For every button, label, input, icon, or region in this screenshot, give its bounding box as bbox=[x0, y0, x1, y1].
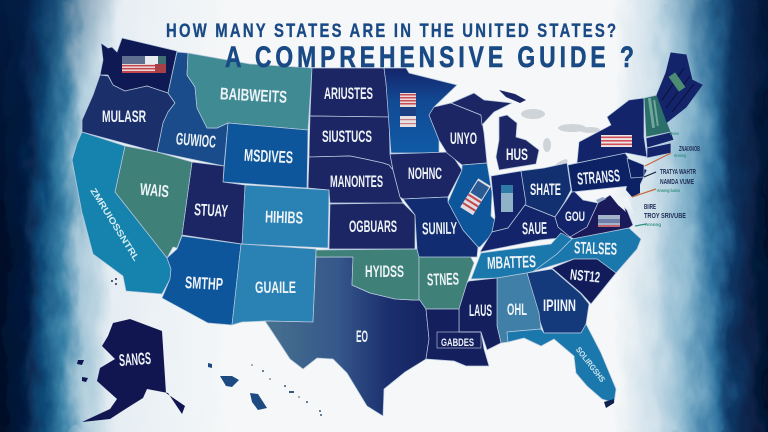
state: Wisconsin bbox=[429, 103, 487, 165]
callouts: east coast annotations: Aronng baino bbox=[657, 188, 680, 193]
state: North Dakota bbox=[310, 68, 389, 117]
state: Florida: SOLIRGSHS bbox=[574, 345, 607, 384]
state: South Dakota bbox=[309, 116, 393, 170]
state: Texas: EO bbox=[356, 327, 368, 346]
state: Kansas bbox=[329, 203, 415, 249]
state: Colorado: HIHIBS bbox=[265, 207, 303, 228]
state: Kansas: OGBUARS bbox=[349, 217, 397, 236]
state: Mississippi: LAUS bbox=[469, 301, 492, 320]
callouts: east coast annotations: NAMDA VUME bbox=[660, 177, 694, 186]
state: Mississippi bbox=[459, 278, 501, 350]
state: Arkansas: STNES bbox=[427, 269, 459, 290]
state: Pennsylvania: STRANSS bbox=[576, 166, 621, 189]
state: Michigan upper peninsula bbox=[451, 90, 526, 125]
state: Montana bbox=[187, 53, 312, 130]
state: Ohio: SHATE bbox=[530, 180, 561, 199]
state: Pennsylvania bbox=[568, 153, 647, 192]
state: West Virginia bbox=[555, 190, 598, 237]
state: Florida bbox=[507, 324, 616, 408]
state: Kentucky: SAUE bbox=[522, 219, 547, 238]
state: Tennessee bbox=[471, 233, 572, 279]
state: New Mexico bbox=[232, 244, 316, 325]
state: Washington bbox=[100, 38, 177, 93]
state: Georgia: IPIINN bbox=[543, 296, 576, 315]
state: Oregon bbox=[82, 75, 175, 152]
state: Nevada: WAIS bbox=[139, 180, 170, 201]
callout lines bbox=[632, 153, 671, 226]
flag: on Minnesota bbox=[400, 93, 416, 127]
state: Oklahoma: HYIDSS bbox=[365, 262, 404, 281]
state: Missouri bbox=[403, 197, 478, 257]
state: Texas bbox=[265, 257, 429, 416]
state: Wyoming bbox=[223, 123, 308, 188]
state: West Virginia: GOU bbox=[565, 208, 585, 224]
state: Hawaii bbox=[208, 363, 322, 416]
state: Arizona: SMTHP bbox=[185, 273, 223, 294]
state: Michigan lower peninsula bbox=[496, 115, 539, 170]
state: New Hampshire and Vermont bbox=[644, 95, 671, 137]
state: Oklahoma bbox=[316, 249, 420, 300]
state: North Carolina bbox=[534, 228, 641, 273]
state: Michigan lower peninsula: HUS bbox=[506, 145, 528, 164]
great lakes smudges bbox=[521, 109, 600, 173]
state: Ohio bbox=[521, 163, 571, 217]
state: Alabama bbox=[497, 273, 541, 343]
state: Minnesota bbox=[384, 68, 457, 153]
state: Utah: STUAY bbox=[194, 200, 229, 221]
state: Nebraska: MANONTES bbox=[330, 172, 383, 191]
state: New Jersey and Maryland coast bbox=[596, 158, 644, 214]
state: Utah bbox=[182, 162, 245, 244]
state: Maine bbox=[657, 53, 702, 122]
state: Virginia bbox=[570, 195, 633, 239]
state: North Dakota: ARIUSTES bbox=[324, 84, 373, 103]
state: Alaska bbox=[77, 319, 185, 422]
state: Missouri: SUNILY bbox=[422, 219, 458, 238]
callouts: east coast annotations: TROY SRIVUBE bbox=[644, 211, 686, 220]
state: Idaho bbox=[157, 52, 228, 166]
islands off California bbox=[111, 278, 117, 285]
flag: on Illinois bbox=[460, 178, 491, 215]
state: Idaho: GUWIOC bbox=[175, 129, 217, 152]
state: South Carolina: NST12 bbox=[569, 266, 601, 287]
callouts: east coast annotations: BIIRE bbox=[644, 202, 656, 211]
map of the United States bbox=[72, 38, 702, 422]
callout text: ZNAIXNOB bbox=[679, 144, 700, 153]
state: Iowa bbox=[390, 152, 462, 199]
callouts: east coast annotations: Aronng bbox=[674, 153, 686, 158]
state: South Dakota: SIUSTUCS bbox=[322, 127, 372, 146]
state: Arkansas bbox=[419, 254, 474, 309]
state: New York bbox=[577, 98, 647, 163]
state: Connecticut bbox=[647, 143, 671, 158]
flag: on New York bbox=[601, 135, 632, 147]
state: Tennessee: MBATTES bbox=[487, 252, 536, 273]
state: Nebraska bbox=[308, 156, 403, 203]
state: Wisconsin: UNYO bbox=[450, 129, 477, 148]
state: Massachusetts bbox=[646, 132, 674, 148]
callouts: east coast annotations: Aronng bbox=[645, 222, 661, 227]
state: Kentucky bbox=[480, 205, 570, 252]
state: Georgia bbox=[527, 269, 589, 333]
state: Alabama: OHL bbox=[507, 300, 527, 319]
state: Nevada bbox=[115, 146, 192, 258]
callouts: east coast annotations: TRATYA WAHTR bbox=[660, 167, 696, 176]
callouts: east coast annotations: Brono bbox=[670, 131, 679, 136]
state: Montana: BAIBWEITS bbox=[220, 84, 287, 107]
state: California bbox=[72, 132, 171, 294]
callouts: east coast annotations bbox=[632, 131, 700, 227]
title line 1: HOW MANY STATES ARE IN THE UNITED STATES? bbox=[166, 20, 616, 41]
state: New Mexico: GUAILE bbox=[255, 278, 296, 297]
state: Colorado bbox=[242, 185, 329, 248]
state: California: ZMRUIOSSNTRL bbox=[88, 186, 142, 263]
title line 2: A COMPREHENSIVE GUIDE ? bbox=[225, 40, 634, 74]
state: Iowa: NOHNC bbox=[408, 164, 442, 183]
state: Alaska: SANGS bbox=[118, 349, 152, 370]
state: Oregon: MULASR bbox=[102, 107, 146, 126]
state: Indiana bbox=[491, 171, 526, 232]
state: Wyoming: MSDIVES bbox=[244, 146, 293, 167]
state: South Carolina bbox=[552, 259, 616, 304]
state: Louisiana: GABDES bbox=[441, 337, 474, 349]
state: Louisiana bbox=[426, 309, 489, 366]
state: North Carolina: STALSES bbox=[574, 238, 617, 259]
state: Arizona bbox=[162, 236, 241, 325]
flag: on Washington bbox=[122, 56, 166, 73]
panel image: on Indiana bbox=[501, 185, 513, 212]
state: Illinois bbox=[448, 163, 495, 247]
flag: on Virginia bbox=[598, 215, 620, 227]
